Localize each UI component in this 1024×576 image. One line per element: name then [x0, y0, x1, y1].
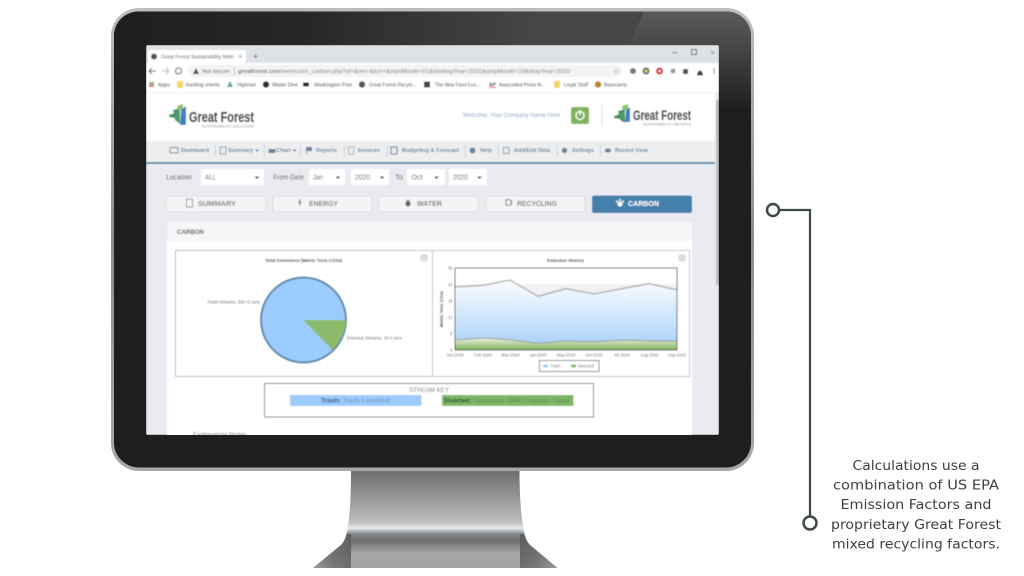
date filters: From Date: [273, 174, 304, 182]
browser tab bar: ×: [710, 50, 715, 57]
date filters: ALL: [205, 174, 216, 182]
stream key: [264, 384, 594, 417]
power button: [571, 107, 589, 124]
site header: [146, 93, 719, 141]
logo: Great Forest Sustainability Metrics: SUSTAINABILITY METRICS: [643, 122, 692, 126]
area chart: emission history: Emission History: [547, 258, 585, 263]
bookmarks bar: Waste Dive: [272, 82, 298, 88]
section tabs: RECYCLING: [517, 201, 558, 208]
stream key: Trash: Trash-Landfilled: [321, 398, 390, 404]
area chart: emission history: 30: [448, 266, 453, 270]
browser tab bar: [146, 45, 719, 63]
section tabs: ENERGY: [309, 201, 338, 208]
navigation bar: Help: [480, 148, 493, 154]
area chart: emission history: 0: [450, 348, 453, 352]
section tabs: [166, 196, 692, 213]
browser address bar: greatforest.com /metrics/m_carbon.php?id=&ver=&ton=&startMonth=01&startingYear=2020&stopMonth=10&stopYear=2020: [238, 69, 570, 75]
area chart: emission history: 12: [448, 315, 453, 320]
callout connector: [767, 204, 816, 530]
navigation bar: Recent View: [615, 148, 649, 154]
date filters: Oct: [412, 174, 423, 182]
section tabs: WATER: [417, 201, 442, 208]
monitor frame: [111, 8, 754, 471]
browser tab bar: +: [253, 52, 258, 62]
browser tab bar: ×: [238, 54, 242, 60]
explanatory notes: Explanatory Notes:: [193, 432, 248, 438]
area chart: emission history: Aug-2020: [640, 352, 659, 358]
area chart: emission history: Sep-2020: [668, 352, 687, 358]
browser address bar: Not secure: [202, 69, 230, 75]
bookmarks bar: Washington Post: [314, 82, 353, 88]
bookmarks bar: Apps: [158, 82, 171, 88]
area chart: emission history: Jun-2020: [585, 352, 603, 358]
stream key: Diverted: Cardboard, GMP, Organics, Paper: [444, 398, 571, 404]
stream key: STREAM KEY: [409, 387, 450, 394]
callout text: [831, 459, 1001, 552]
area chart: emission history: Feb-2020: [474, 352, 493, 358]
date filters: Location: [166, 174, 192, 182]
site header: Welcome, Your Company Name Here: [463, 112, 561, 119]
browser screenshot: [146, 45, 719, 442]
pie chart: total emissions: Trash Streams, 203.71 tons: [207, 300, 261, 304]
area chart: emission history: 24: [448, 282, 453, 287]
callout text: Emission Factors and: [840, 498, 992, 513]
chart legend: [540, 360, 599, 372]
area chart: emission history: Jul-2020: [614, 352, 631, 358]
date filters: 2020: [355, 174, 370, 182]
area chart: emission history: 18: [448, 298, 453, 304]
logo: Great Forest Sustainability Metrics: Great Forest: [633, 108, 691, 123]
chart legend: Trash: [550, 364, 561, 368]
bookmarks bar: tracking sheets: [186, 82, 220, 88]
area chart: emission history: Jan-2020: [446, 352, 464, 358]
callout text: Calculations use a: [852, 459, 980, 474]
pie chart: total emissions: Diverted Streams, 30.2 tons: [347, 336, 403, 340]
navigation bar: Reports: [316, 148, 337, 154]
bookmarks bar: Associated Press N...: [499, 82, 545, 88]
bookmarks bar: Basecamp: [604, 82, 627, 88]
pie chart: total emissions: Total Emissions (Metric Tons CO2e): [265, 258, 343, 263]
browser tab bar: Great Forest Sustainability Metri: [161, 54, 234, 60]
callout text: combination of US EPA: [833, 478, 999, 494]
navigation bar: Invoices: [358, 148, 380, 154]
area chart: emission history: 6: [450, 331, 453, 336]
navigation bar: Budgeting & Forecast: [402, 148, 459, 154]
monitor stand: [313, 471, 558, 568]
scrollbar: [714, 93, 719, 286]
logo: Great Forest Sustainability Solutions: SUSTAINABILITY SOLUTIONS: [202, 124, 255, 128]
date filters: 2020: [453, 174, 468, 182]
browser address bar: [146, 63, 719, 78]
bookmarks bar: Great Forest Recycl...: [369, 82, 416, 88]
section tabs: SUMMARY: [198, 201, 236, 208]
date filters: To: [395, 174, 403, 182]
bookmarks bar: Highrise: [237, 82, 256, 88]
area chart: emission history: [432, 250, 690, 376]
area chart: emission history: May-2020: [557, 352, 576, 358]
navigation bar: [146, 145, 716, 164]
callout text: proprietary Great Forest: [831, 518, 1001, 533]
logo: Great Forest Sustainability Metrics: [614, 104, 692, 126]
browser address bar: ☆: [613, 68, 619, 76]
logo: Great Forest Sustainability Solutions: Great Forest: [189, 110, 254, 126]
navigation bar: Settings: [572, 148, 594, 154]
date filters: Jan: [313, 174, 323, 182]
carbon panel: CARBON: [177, 229, 204, 236]
navigation bar: Dashboard: [181, 148, 210, 154]
date filters: [166, 169, 487, 185]
logo: Great Forest Sustainability Solutions: [169, 104, 255, 128]
navigation bar: Chart: [276, 148, 291, 154]
area chart: emission history: Apr-2020: [529, 352, 547, 358]
navigation bar: Add/Edit Data: [514, 148, 551, 154]
bookmarks bar: The New Food Eco...: [435, 82, 480, 88]
pie chart: total emissions: [176, 250, 432, 376]
navigation bar: Summary: [228, 148, 254, 154]
carbon panel: [167, 222, 692, 442]
bookmarks bar: [146, 78, 719, 93]
bookmarks bar: AP: [489, 82, 497, 88]
callout text: mixed recycling factors.: [832, 538, 1000, 552]
bookmarks bar: Legal Stuff: [564, 82, 589, 88]
section tabs: CARBON: [628, 201, 659, 208]
chart legend: Diverted: [578, 364, 594, 368]
area chart: emission history: Metric Tons CO2e: [439, 290, 444, 327]
area chart: emission history: Mar-2020: [502, 352, 520, 358]
